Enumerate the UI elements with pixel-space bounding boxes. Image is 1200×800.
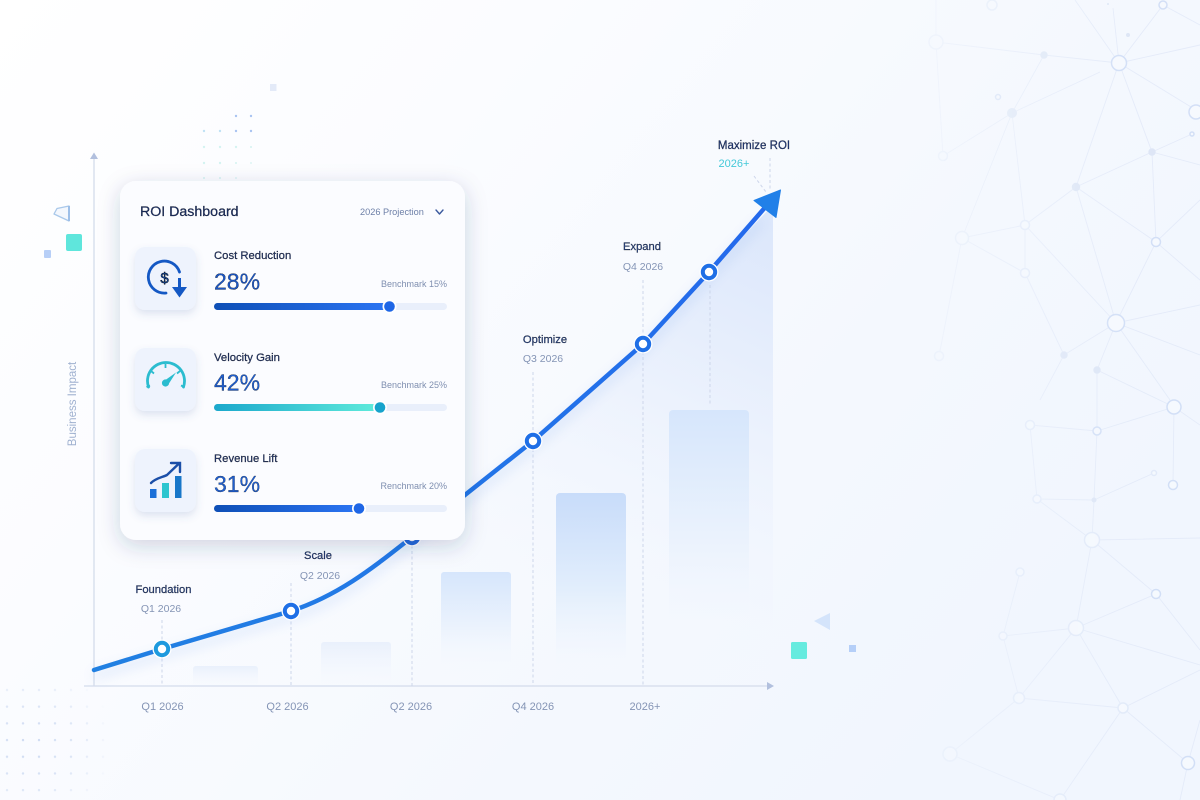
network pattern <box>929 0 1200 800</box>
milestone labels: Q2 2026 <box>300 570 340 582</box>
metric: revenue lift: 31% <box>214 471 260 497</box>
dot grid: top <box>203 115 252 179</box>
milestone labels: Optimize <box>523 334 567 346</box>
milestone labels: Q4 2026 <box>623 261 663 273</box>
milestone labels: Foundation <box>136 584 191 596</box>
arrowhead <box>754 190 780 218</box>
icon: rising bars <box>150 463 182 498</box>
growth curve <box>94 204 768 670</box>
dot grid: bottom left <box>6 689 103 792</box>
decorative shapes: right <box>791 613 856 659</box>
milestone markers <box>152 262 718 658</box>
bar chart <box>193 410 749 686</box>
x axis labels: Q2 2026 <box>266 701 309 713</box>
metric: revenue lift: Revenue Lift <box>214 453 278 465</box>
metric: velocity gain: Benchmark 25% <box>381 380 447 390</box>
icon: dollar with down arrow <box>148 261 187 298</box>
milestone labels: Q1 2026 <box>141 603 181 615</box>
metric: revenue lift <box>135 449 447 516</box>
panel: ROI dashboard <box>120 181 465 540</box>
x axis labels: Q4 2026 <box>512 701 554 713</box>
milestone labels: Q3 2026 <box>523 353 563 365</box>
metric: velocity gain <box>135 348 447 414</box>
metric: cost reduction: Benchmark 15% <box>381 279 447 289</box>
x axis labels: 2026+ <box>630 701 660 713</box>
projection selector: 2026 Projection <box>360 207 424 217</box>
milestone labels: 2026+ <box>719 158 749 170</box>
metric: revenue lift: Renchmark 20% <box>380 481 447 491</box>
decorative shapes: left <box>44 84 276 258</box>
milestone labels: Maximize ROI <box>718 140 790 152</box>
axes <box>84 152 774 690</box>
x axis labels: Q1 2026 <box>141 701 184 713</box>
milestone labels: Expand <box>623 241 661 253</box>
curve shadow <box>94 222 760 676</box>
milestone labels <box>136 140 790 615</box>
metric: velocity gain: 42% <box>214 370 260 396</box>
metric: cost reduction: 28% <box>214 268 260 294</box>
icon: dollar with down arrow: $ <box>160 270 169 287</box>
x axis labels <box>141 701 660 713</box>
metric: velocity gain: Velocity Gain <box>214 352 280 364</box>
y axis title: Business Impact <box>67 361 79 446</box>
milestone labels: Scale <box>304 550 332 562</box>
metric: cost reduction <box>135 247 447 314</box>
milestone guide lines <box>162 158 770 686</box>
icon: speedometer <box>146 362 184 387</box>
area under growth curve <box>94 205 773 686</box>
metric: cost reduction: Cost Reduction <box>214 250 291 262</box>
x axis labels: Q2 2026 <box>390 701 432 713</box>
heading: ROI Dashboard <box>140 204 239 220</box>
